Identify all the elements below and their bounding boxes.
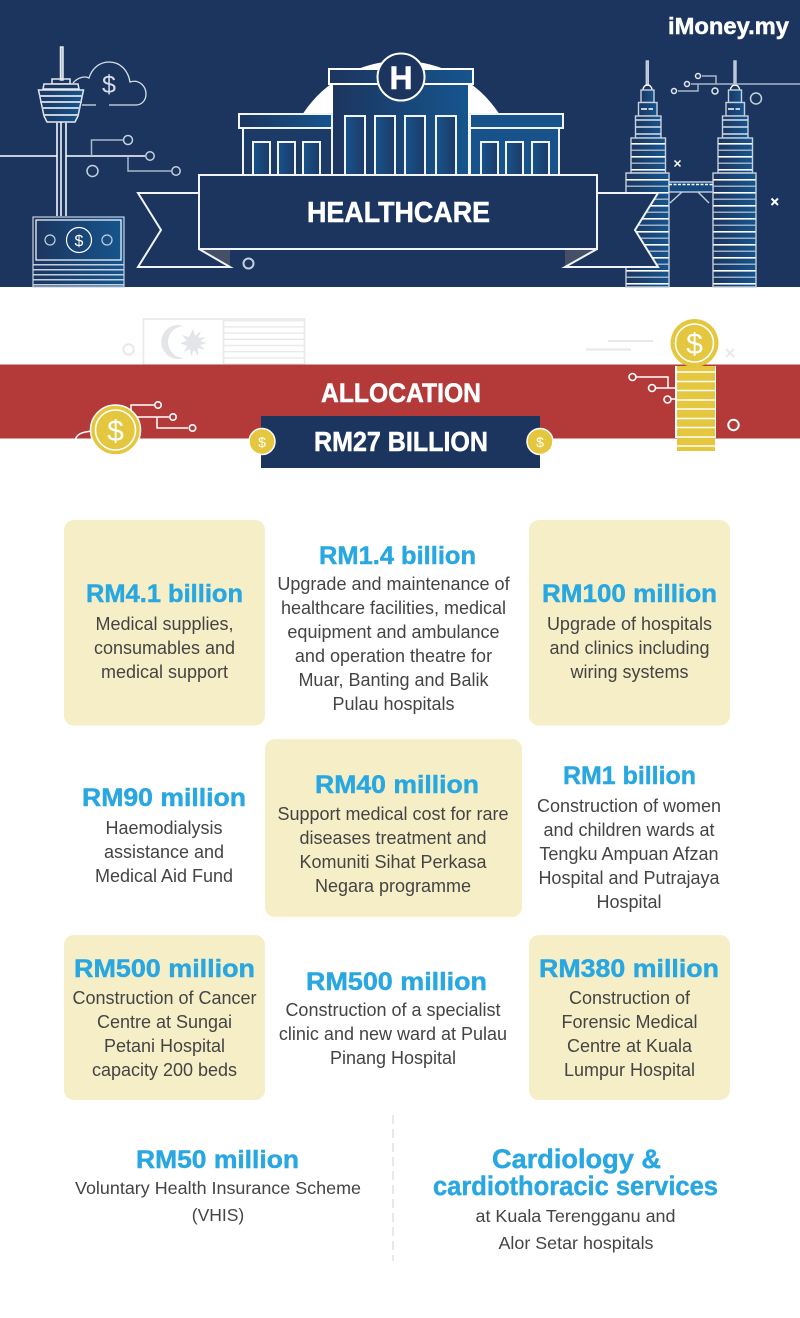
icon: small coin right: $ [536, 434, 544, 450]
icon: coin stack right with circuit [629, 319, 718, 451]
H badge: H [389, 60, 413, 96]
card: RM40 million: Komuniti Sihat Perkasa [299, 852, 488, 872]
card: RM100 million: and clinics including [549, 638, 710, 658]
item: RM1.4 billion: and operation theatre for [295, 646, 492, 666]
item: RM50 million: Voluntary Health Insurance Scheme [75, 1178, 361, 1198]
item: RM90 million: RM90 million [82, 784, 246, 812]
item: RM1 billion: and children wards at [543, 820, 715, 840]
left tower [626, 61, 669, 287]
icon: coin left with circuit: $ [107, 415, 124, 448]
card: RM380 million: RM380 million [539, 955, 719, 983]
heading: allocation: ALLOCATION [321, 378, 481, 408]
center windows [345, 116, 456, 176]
card: RM4.1 billion: Medical supplies, [95, 614, 234, 634]
item: RM500 million specialist clinic: Pinang Hospital [330, 1048, 456, 1068]
card: RM100 million [529, 520, 730, 726]
right tail [565, 193, 658, 267]
item: cardiology: Cardiology & [492, 1144, 661, 1174]
item: RM1.4 billion: RM1.4 billion [319, 542, 476, 570]
ribbon body [199, 175, 597, 249]
item: RM50 million: RM50 million [136, 1146, 299, 1174]
item: RM90 million: Medical Aid Fund [95, 866, 233, 886]
card: RM40 million: Negara programme [315, 876, 471, 896]
icon: cloud with dollar: $ [102, 71, 116, 99]
item: cardiology [433, 1144, 718, 1253]
card: RM380 million: Forensic Medical [561, 1012, 698, 1032]
item: cardiology: Alor Setar hospitals [498, 1233, 654, 1253]
icon: small coin left [249, 428, 275, 454]
header panel [0, 0, 800, 287]
amount box: RM27 BILLION [314, 426, 488, 457]
amount box [261, 416, 540, 468]
icon: small coin left: $ [258, 434, 266, 450]
card: RM40 million: Support medical cost for rare [277, 804, 509, 824]
right fold [565, 249, 597, 267]
item: cardiology: at Kuala Terengganu and [476, 1206, 676, 1226]
item: RM1 billion: Hospital [596, 892, 662, 912]
item: RM1 billion: Construction of women [537, 796, 721, 816]
skybridge [669, 182, 713, 203]
item: cardiology: cardiothoracic services [433, 1171, 718, 1201]
card: RM500 million Cancer Centre: Petani Hospital [104, 1036, 225, 1056]
item: RM500 million specialist clinic: clinic and new ward at Pulau [279, 1024, 507, 1044]
icon: small coin right [527, 428, 553, 454]
item: RM1 billion: Hospital and Putrajaya [538, 868, 721, 888]
item: RM1.4 billion: equipment and ambulance [287, 622, 500, 642]
item: RM500 million specialist clinic: Construction of a specialist [285, 1000, 501, 1020]
card: RM4.1 billion [64, 520, 265, 726]
card: RM100 million: RM100 million [542, 580, 717, 608]
item: RM50 million [75, 1146, 361, 1225]
small ring [244, 258, 254, 268]
card: RM4.1 billion: RM4.1 billion [86, 580, 243, 608]
item: RM500 million specialist clinic: RM500 million [306, 968, 487, 996]
item: RM50 million: (VHIS) [192, 1205, 244, 1225]
card: RM40 million: diseases treatment and [299, 828, 487, 848]
card: RM100 million: Upgrade of hospitals [547, 614, 712, 634]
item: RM1 billion: Tengku Ampuan Afzan [539, 844, 719, 864]
icon: cloud with dollar [73, 62, 146, 105]
right tower [713, 61, 756, 287]
circuit lines left [0, 136, 180, 176]
icon: x marks [674, 160, 778, 205]
icon: coin left with circuit [75, 402, 196, 455]
left fold [200, 249, 230, 267]
dome [303, 61, 499, 114]
item: RM90 million: assistance and [104, 842, 224, 862]
card: RM380 million: Construction of [569, 988, 691, 1008]
item: RM1 billion: RM1 billion [563, 762, 696, 790]
card: RM500 million Cancer Centre [64, 935, 265, 1100]
card: RM500 million Cancer Centre: capacity 200 beds [92, 1060, 237, 1080]
decorative lines and x mark [586, 341, 734, 357]
icon: coin stack right with circuit: $ [686, 328, 703, 361]
icon: banknote stack [33, 217, 124, 287]
right wing [470, 114, 563, 176]
flag outline [123, 319, 304, 365]
center block [332, 84, 469, 176]
left tail [138, 193, 230, 267]
icon: twin towers [626, 61, 756, 287]
card: RM380 million: Centre at Kuala [567, 1036, 693, 1056]
H badge [378, 54, 424, 100]
item: RM90 million: Haemodialysis [105, 818, 223, 838]
hospital illustration [239, 54, 563, 176]
ribbon banner [138, 175, 658, 267]
item: RM1.4 billion [277, 542, 511, 714]
small ring [728, 420, 739, 430]
logo: iMoney.my [668, 13, 789, 39]
item: RM500 million specialist clinic [279, 968, 507, 1068]
left wing [239, 114, 332, 176]
card: RM500 million Cancer Centre: Centre at Sungai [97, 1012, 232, 1032]
card: RM4.1 billion: medical support [101, 662, 228, 682]
card: RM40 million [265, 739, 522, 917]
icon: banknote stack: $ [75, 233, 84, 250]
card: RM380 million: Lumpur Hospital [564, 1060, 695, 1080]
card: RM40 million: RM40 million [315, 771, 479, 799]
item: RM1 billion [537, 762, 721, 912]
card: RM4.1 billion: consumables and [94, 638, 235, 658]
card: RM100 million: wiring systems [569, 662, 689, 682]
card: RM500 million Cancer Centre: Construction of Cancer [72, 988, 257, 1008]
item: RM1.4 billion: healthcare facilities, medical [281, 598, 506, 618]
item: RM1.4 billion: Upgrade and maintenance of [277, 574, 511, 594]
item: RM1.4 billion: Muar, Banting and Balik [298, 670, 490, 690]
card: RM380 million [529, 935, 730, 1100]
card: RM500 million Cancer Centre: RM500 million [74, 955, 255, 983]
center roof [329, 69, 473, 84]
icon: KL tower [38, 47, 84, 216]
item: RM1.4 billion: Pulau hospitals [332, 694, 455, 714]
circuit lines right [672, 74, 800, 104]
allocation band [0, 319, 800, 468]
item: RM90 million [82, 784, 246, 886]
heading: healthcare: HEALTHCARE [307, 197, 490, 229]
